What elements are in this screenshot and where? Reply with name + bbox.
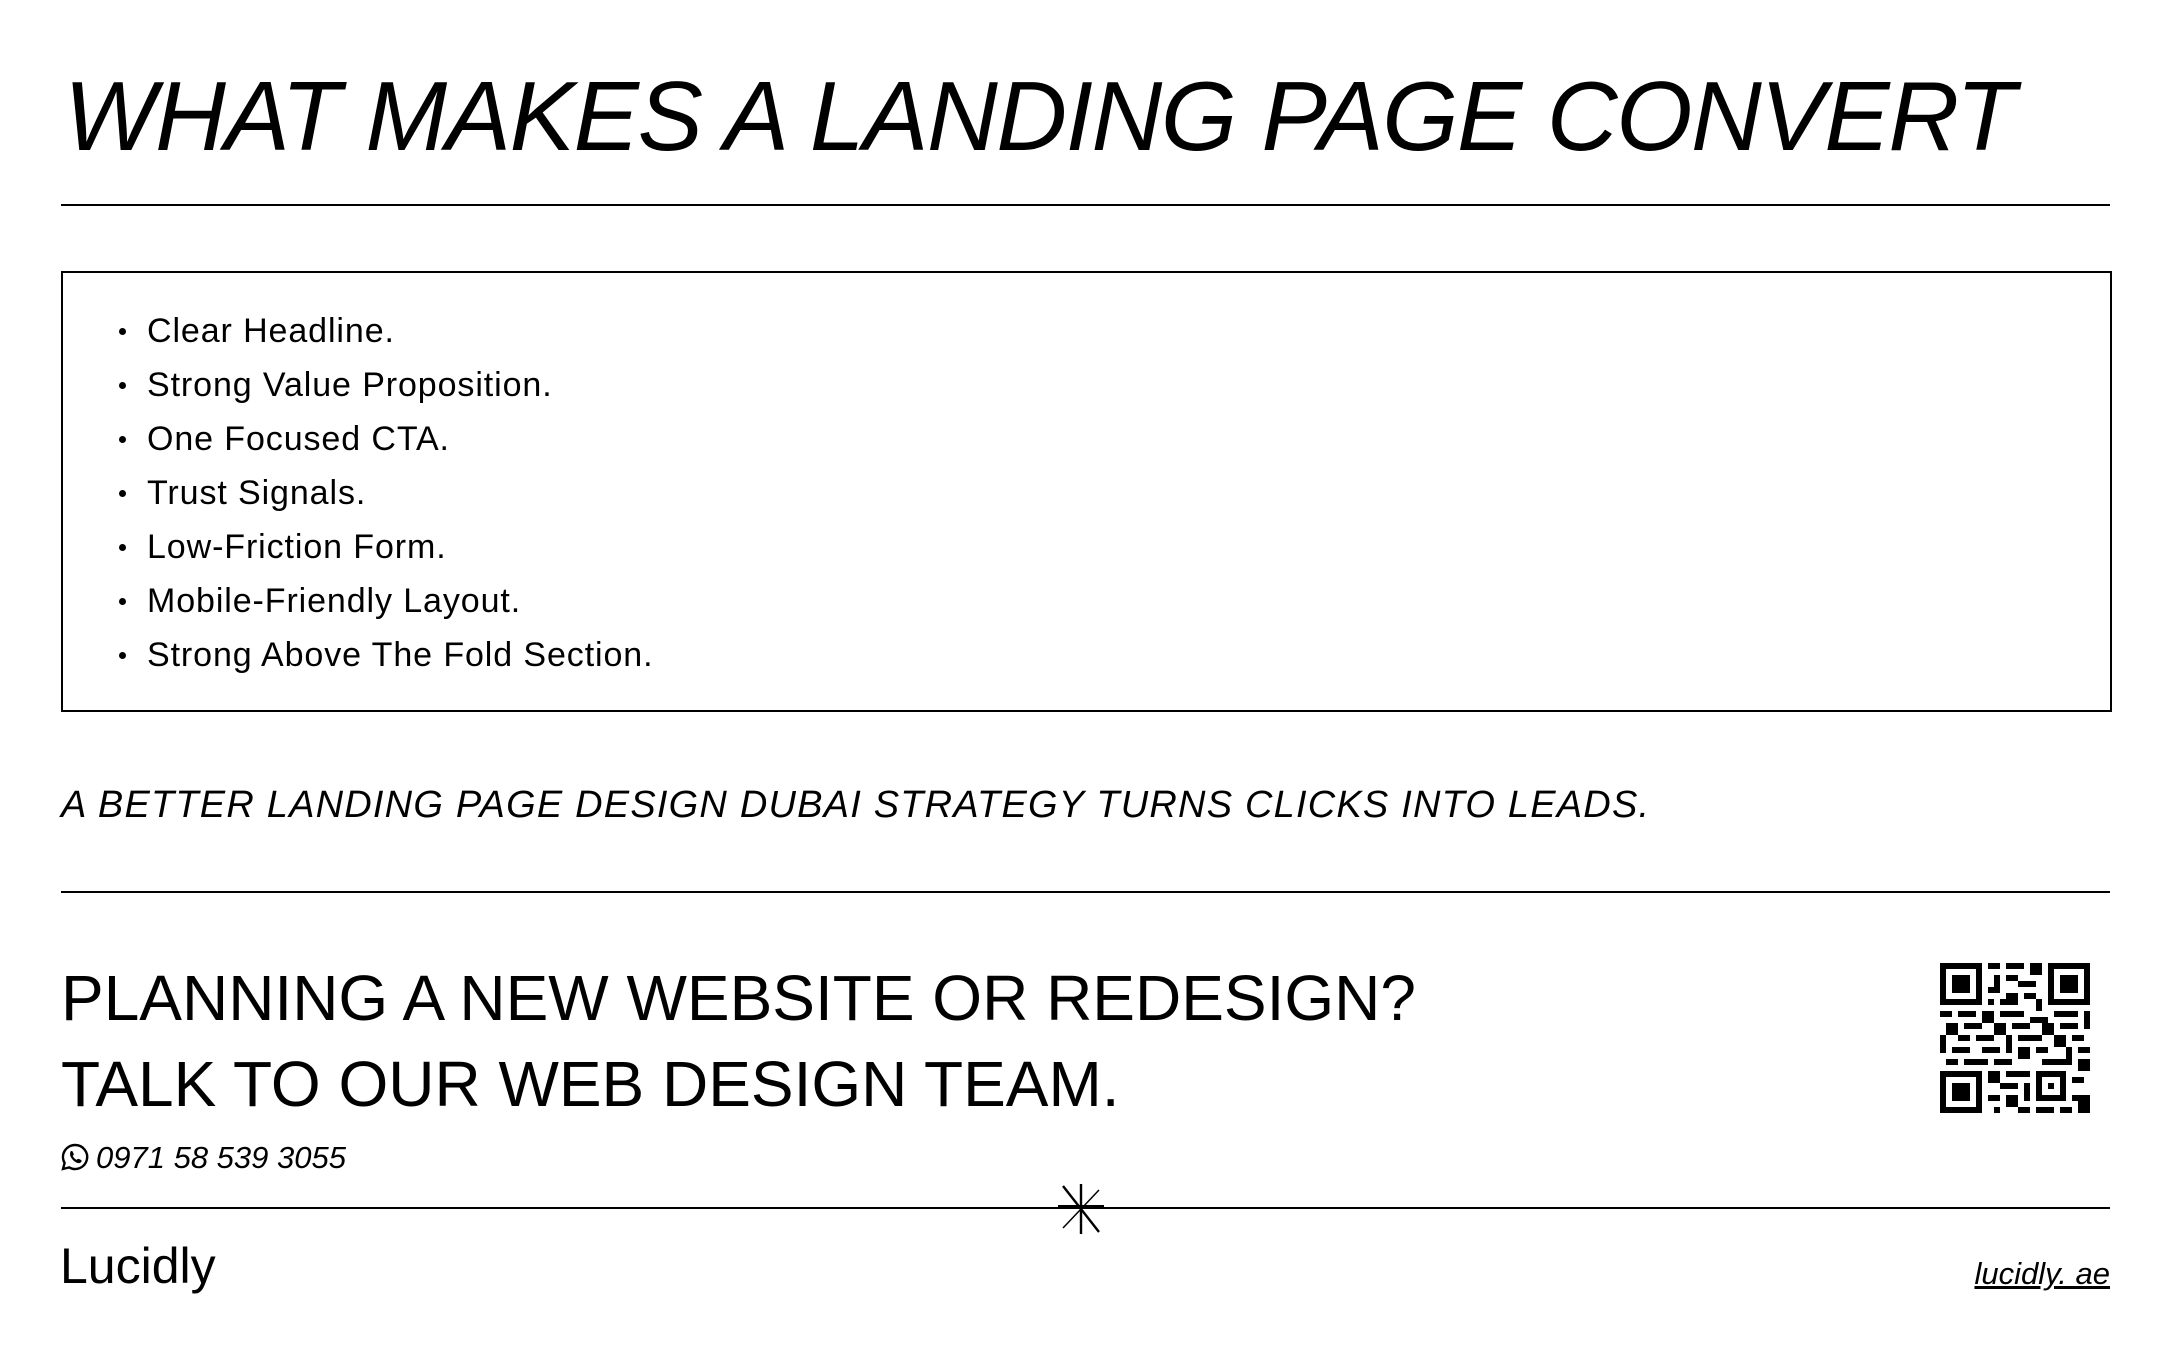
list items: Strong Value Proposition. [147,366,553,404]
list items: One Focused CTA. [147,420,450,458]
panel: checklist [61,271,2112,712]
tagline: A BETTER LANDING PAGE DESIGN DUBAI STRATEGY TURNS CLICKS INTO LEADS. [61,784,1650,826]
list items [119,312,653,674]
call to action heading: PLANNING A NEW WEBSITE OR REDESIGN? [61,962,1416,1034]
call to action heading [61,962,1416,1120]
list items: Mobile-Friendly Layout. [147,582,521,620]
logo: Lucidly: Lucidly [60,1238,216,1294]
icon: whatsapp [61,1144,88,1171]
phone contact: 0971 58 539 3055 [96,1140,346,1175]
call to action heading: TALK TO OUR WEB DESIGN TEAM. [61,1048,1120,1120]
list items: Strong Above The Fold Section. [147,636,653,674]
icon: star mark [1058,1184,1104,1234]
list items: Trust Signals. [147,474,366,512]
title: WHAT MAKES A LANDING PAGE CONVERT [64,61,2014,171]
qr code [1940,963,2090,1113]
website link: lucidly. ae [1974,1256,2110,1291]
list items: Low-Friction Form. [147,528,447,566]
list items: Clear Headline. [147,312,395,350]
